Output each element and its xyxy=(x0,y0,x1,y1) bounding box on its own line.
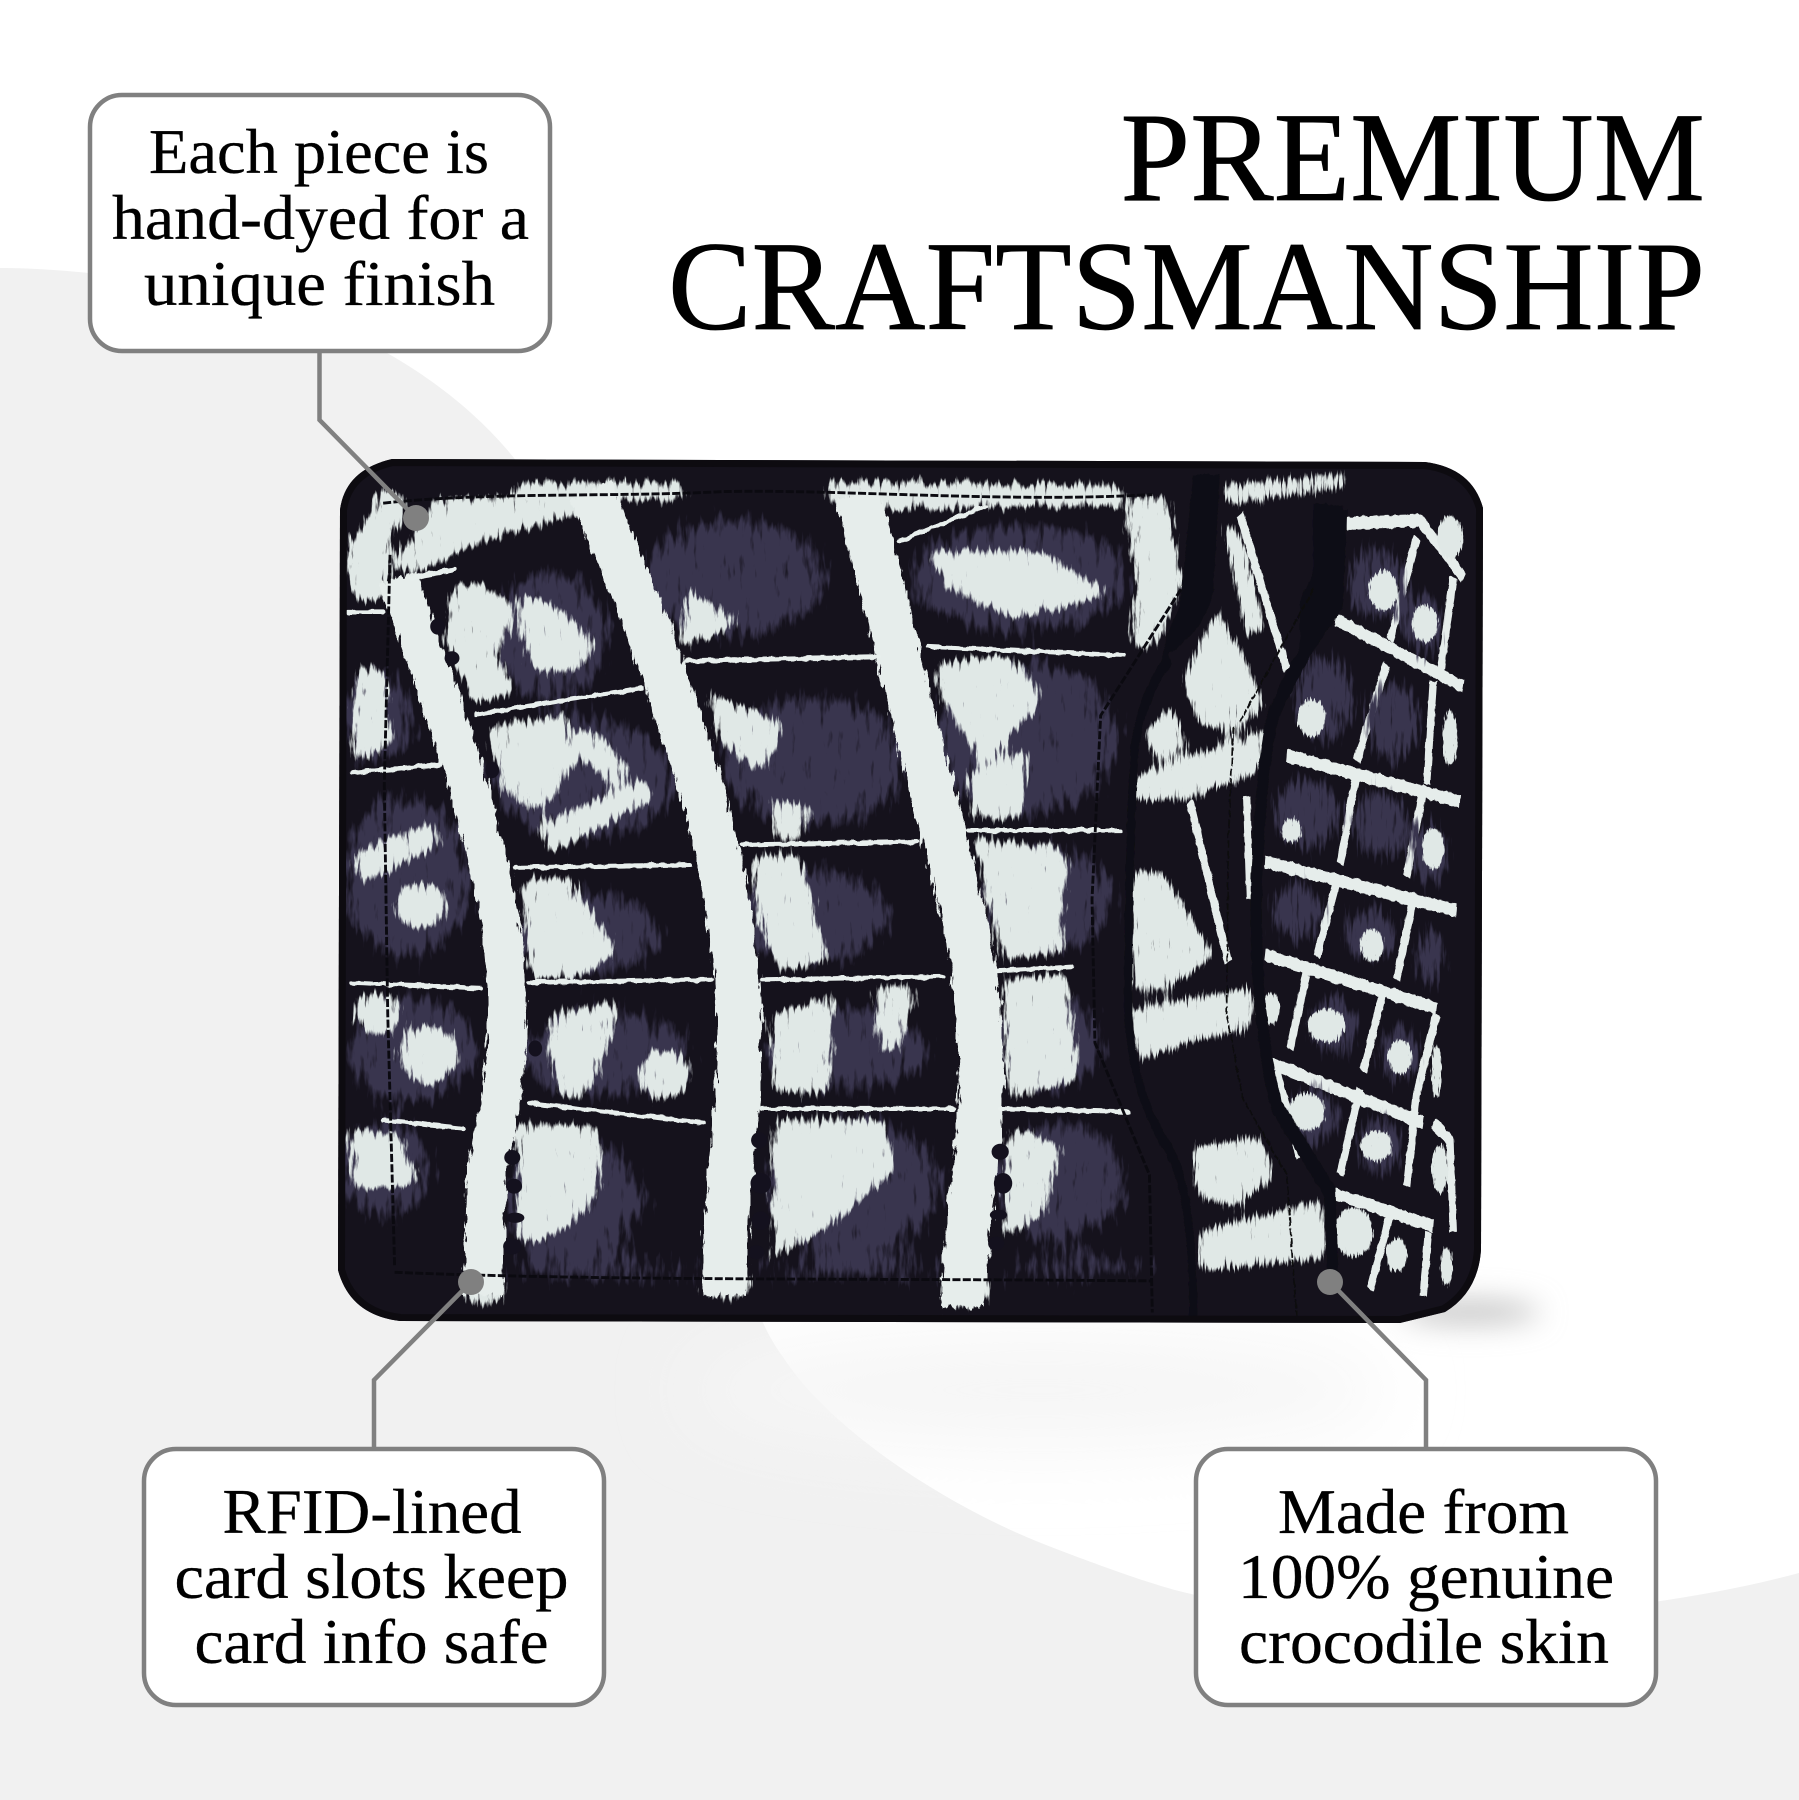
callout: genuine crocodile skin: 100% genuine xyxy=(1238,1541,1614,1612)
right side: between-pocket patches xyxy=(1127,472,1347,1272)
callout: hand-dyed finish: hand-dyed for a xyxy=(112,182,529,253)
title: PREMIUM xyxy=(1120,88,1705,228)
horizontal scale lines xyxy=(349,506,1129,1129)
dark scale dots beside ribs xyxy=(430,619,1012,1259)
wallet edge binding xyxy=(338,459,1483,1323)
callout: hand-dyed finish: unique finish xyxy=(144,248,495,319)
callout: genuine crocodile skin: crocodile skin xyxy=(1239,1606,1609,1677)
right side: pale lines between crocodile scale tiles xyxy=(1190,515,1463,1295)
title xyxy=(668,88,1705,357)
right side: crocodile scale tile dye xyxy=(1263,516,1464,1287)
callout: hand-dyed finish: Each piece is xyxy=(149,116,489,187)
stitching around main panel xyxy=(383,491,1181,1312)
callout: RFID-lined card slots: card info safe xyxy=(194,1606,548,1677)
callout: RFID-lined card slots: RFID-lined xyxy=(222,1476,522,1547)
callout: genuine crocodile skin: Made from xyxy=(1278,1476,1569,1547)
card slot pocket edges xyxy=(1128,474,1343,1318)
callout: RFID-lined card slots xyxy=(144,1269,604,1705)
wallet leather base xyxy=(330,450,1490,1330)
title: CRAFTSMANSHIP xyxy=(668,217,1705,357)
three vertical belly ribs xyxy=(397,492,981,1307)
callout: genuine crocodile skin xyxy=(1196,1269,1656,1705)
main panel: white hand-dye patches xyxy=(345,480,1184,1309)
callout: hand-dyed finish xyxy=(90,95,550,531)
callout: RFID-lined card slots: card slots keep xyxy=(174,1541,568,1612)
main panel: lilac dye shading xyxy=(331,515,1175,1282)
product photo: crocodile card wallet xyxy=(330,450,1490,1330)
wallet shadow and reflection xyxy=(690,1300,1540,1450)
